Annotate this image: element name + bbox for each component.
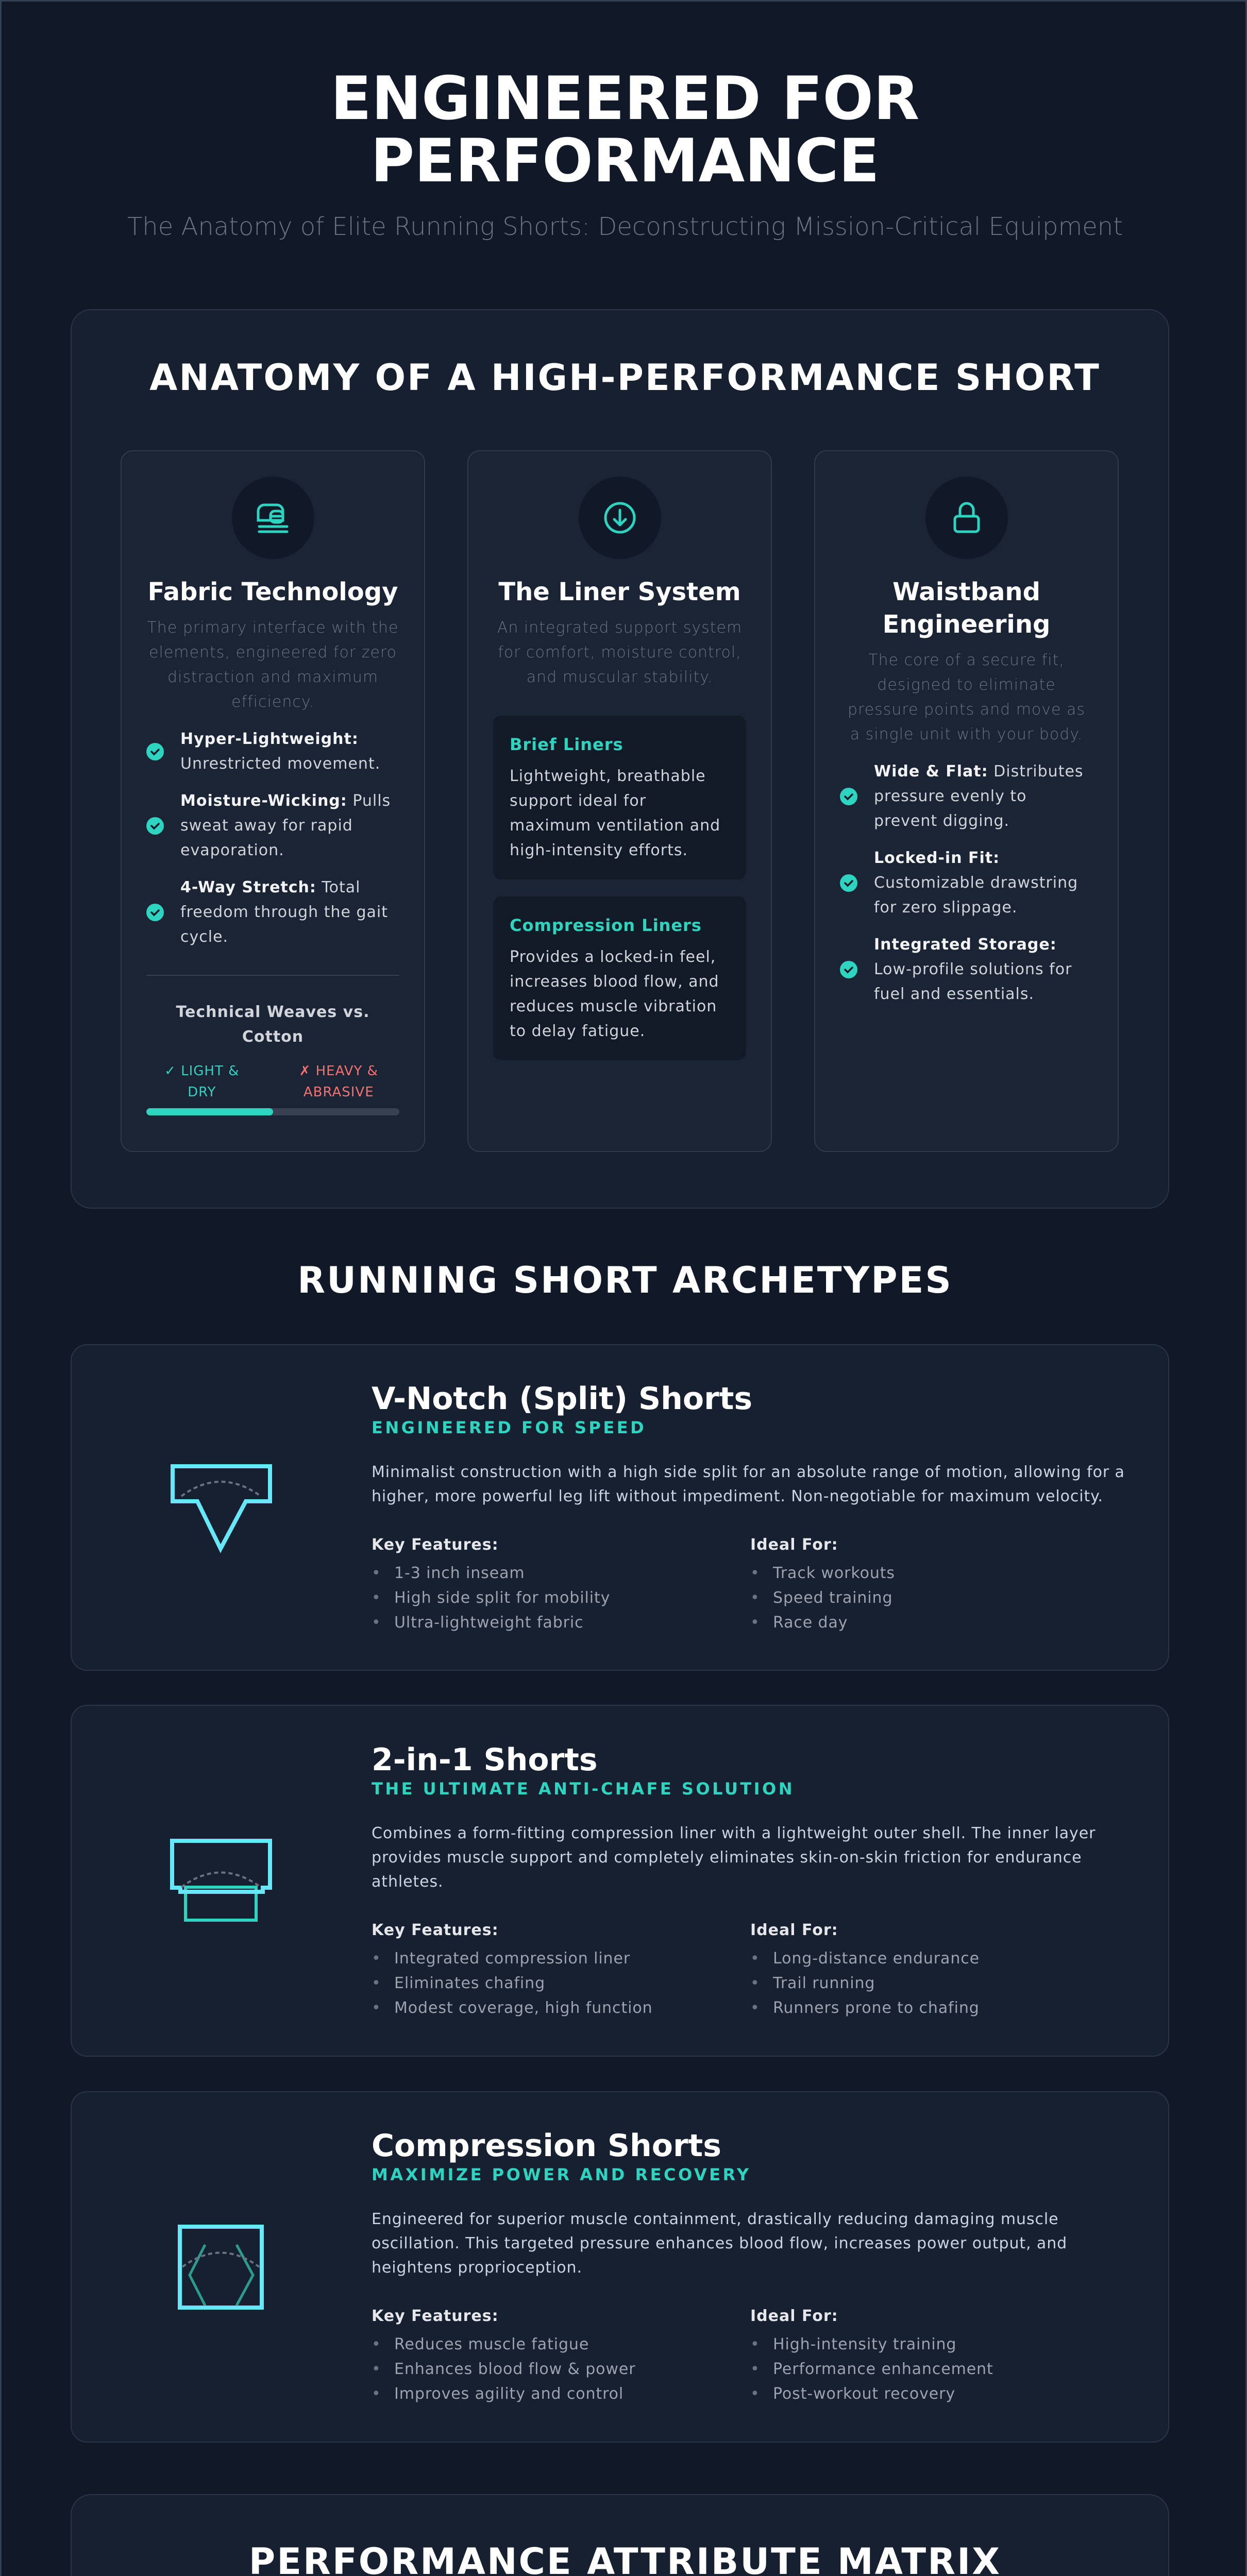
feature: stretch: 4-Way Stretch: Total freedom through the gait cycle. [180, 878, 388, 946]
matrix header [2, 1, 1247, 2]
text: 2-in-1: Modest coverage, high function [394, 1999, 653, 2016]
archetype card: 2-in-1 [71, 1705, 1169, 2057]
feature: storage: Integrated Storage: Low-profile solutions for fuel and essentials. [874, 936, 1072, 1003]
subtitle: The Anatomy of Elite Running Shorts: Deconstructing Mission-Critical Equipment [127, 212, 1123, 241]
text: compression: Reduces muscle fatigue [394, 2335, 589, 2353]
text: v-notch: Key Features: [372, 1535, 499, 1554]
card title: Engineering [883, 610, 1050, 639]
text: v-notch: ENGINEERED FOR SPEED [372, 1418, 646, 1437]
text: compression [372, 2128, 1067, 2403]
text: 2-in-1: Key Features: [372, 1921, 499, 1939]
text: v-notch: High side split for mobility [394, 1589, 610, 1606]
text: v-notch: Ideal For: [750, 1535, 838, 1554]
text: compression: Ideal For: [750, 2307, 838, 2325]
box: brief liners [493, 716, 746, 879]
text: 2-in-1 [372, 1741, 1096, 2016]
text: compression: Engineered for superior muscle containment, drastically reducing damaging muscle oscillation. This targeted pressure enhances blood flow, increases power output, and heightens proprioception. [372, 2210, 1067, 2277]
text: v-notch: 1-3 inch inseam [394, 1564, 525, 1582]
text: 2-in-1: Integrated compression liner [394, 1950, 630, 1967]
card: liner system [467, 450, 772, 1152]
text: compression: Post-workout recovery [773, 2385, 955, 2403]
text: v-notch: Minimalist construction with a high side split for an absolute range of motion, allowing for a higher, more powerful leg lift without impediment. Non-negotiable for maximum velocity. [372, 1463, 1125, 1505]
icon: compression short [178, 2225, 264, 2310]
box: compression liners [493, 896, 746, 1060]
text: 2-in-1: Long-distance endurance [773, 1950, 980, 1967]
card title: Fabric Technology [148, 578, 398, 606]
card description: An integrated support system for comfort, moisture control, and muscular stability. [497, 619, 742, 686]
text: 2-in-1: Ideal For: [750, 1921, 838, 1939]
text: compression: MAXIMIZE POWER AND RECOVERY [372, 2165, 751, 2184]
icon: arrow down circle [578, 477, 661, 559]
text: 2-in-1: 2-in-1 Shorts [372, 1741, 598, 1777]
comparison: weaves vs cotton: ✓ LIGHT & DRY [164, 1063, 239, 1100]
title: PERFORMANCE [370, 126, 880, 196]
comparison: weaves vs cotton: ✗ HEAVY & ABRASIVE [299, 1063, 378, 1100]
text: 2-in-1: Trail running [773, 1974, 875, 1992]
text: compression: Improves agility and control [394, 2385, 624, 2403]
panel: performance matrix [71, 2494, 1169, 2576]
box: compression liners: Provides a locked-in feel, increases blood flow, and reduces muscle vibration to delay fatigue. [510, 948, 719, 1040]
text: compression: Performance enhancement [773, 2360, 993, 2378]
box: brief liners: Brief Liners [510, 735, 624, 754]
card description: The core of a secure fit, designed to eliminate pressure points and move as a single unit with your body. [848, 651, 1085, 743]
icon: v-notch short [171, 1464, 272, 1553]
title [331, 64, 919, 196]
text: v-notch: Speed training [773, 1589, 892, 1606]
text: v-notch [372, 1381, 1125, 1631]
box: compression liners: Compression Liners [510, 916, 702, 935]
text: v-notch: Track workouts [773, 1564, 895, 1582]
icon: 2-in-1 short [170, 1839, 272, 1922]
card description: The primary interface with the elements, engineered for zero distraction and maximum efficiency. [147, 619, 399, 711]
text: compression: Enhances blood flow & power [394, 2360, 635, 2378]
comparison: weaves vs cotton: Cotton [242, 1028, 304, 1046]
comparison: weaves vs cotton: Technical Weaves vs. [176, 1003, 370, 1021]
text: v-notch: V-Notch (Split) Shorts [372, 1381, 752, 1417]
icon: lock [925, 477, 1008, 559]
card title [883, 578, 1050, 639]
text: v-notch: Race day [773, 1614, 848, 1631]
feature: locked-in: Locked-in Fit: Customizable drawstring for zero slippage. [874, 849, 1078, 917]
text: 2-in-1: Eliminates chafing [394, 1974, 545, 1992]
text: v-notch: Ultra-lightweight fabric [394, 1614, 584, 1631]
card: fabric technology [121, 450, 425, 1152]
icon: fabric [232, 477, 314, 559]
archetype card: v-notch [71, 1344, 1169, 1671]
text: 2-in-1: Runners prone to chafing [773, 1999, 980, 2016]
feature list [840, 762, 1084, 1003]
feature: lightweight: Hyper-Lightweight: Unrestricted movement. [180, 730, 380, 773]
title: ENGINEERED FOR [331, 64, 919, 133]
heading: anatomy: ANATOMY OF A HIGH-PERFORMANCE SHORT [149, 357, 1101, 399]
comparison: weaves vs cotton [146, 1003, 399, 1115]
feature list [146, 730, 391, 946]
archetype card: compression [71, 2091, 1169, 2443]
text: compression: Key Features: [372, 2307, 499, 2325]
feature: wicking: Moisture-Wicking: Pulls sweat away for rapid evaporation. [180, 792, 391, 859]
text: compression: High-intensity training [773, 2335, 956, 2353]
text: compression: Compression Shorts [372, 2128, 721, 2164]
text: 2-in-1: Combines a form-fitting compression liner with a lightweight outer shell. The inner layer provides muscle support and completely eliminates skin-on-skin friction for endurance athletes. [372, 1824, 1096, 1891]
panel: anatomy [71, 309, 1169, 1209]
feature: wide flat: Wide & Flat: Distributes pressure evenly to prevent digging. [874, 762, 1084, 830]
heading: archetypes: RUNNING SHORT ARCHETYPES [297, 1259, 953, 1301]
box: brief liners: Lightweight, breathable support ideal for maximum ventilation and high-intensity efforts. [510, 767, 720, 859]
card title: Waistband [892, 578, 1040, 606]
card: waistband engineering [814, 450, 1119, 1152]
text: 2-in-1: THE ULTIMATE ANTI-CHAFE SOLUTION [372, 1778, 795, 1798]
card title: The Liner System [498, 578, 741, 606]
